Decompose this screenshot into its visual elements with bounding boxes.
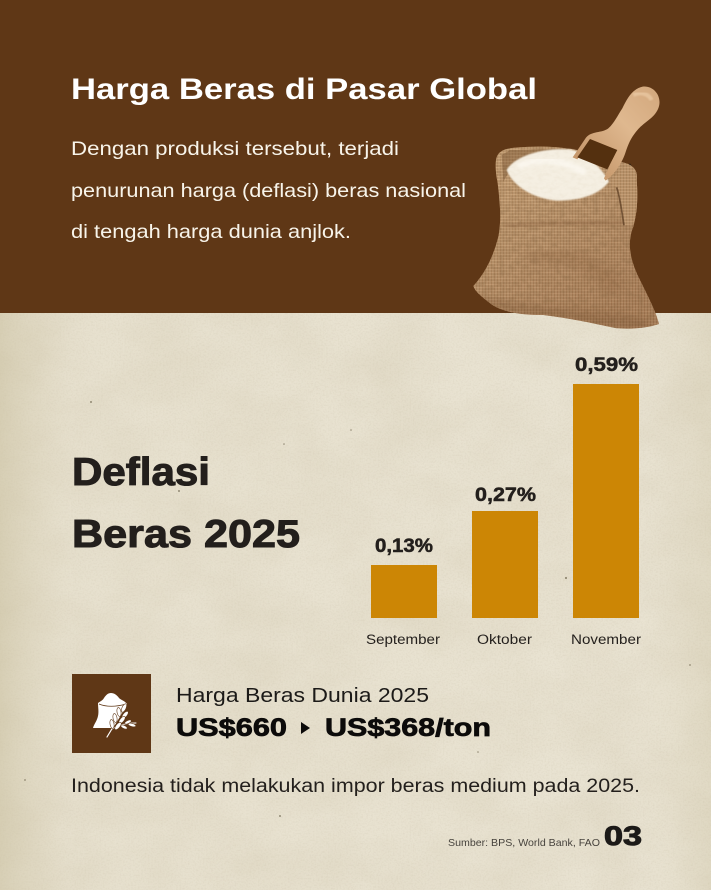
wooden scoop [573,87,660,181]
paper background [0,313,711,890]
sack back rim [610,163,637,183]
bar: November [571,355,642,647]
title: Harga Beras di Pasar Global [71,73,537,106]
sack flap at right corner [609,164,637,225]
intro text [71,138,466,243]
world rice price values: US$660 [176,714,287,742]
world rice price values [176,714,491,742]
source: Sumber: BPS, World Bank, FAO [448,837,600,849]
bar: November: November [571,632,642,647]
icon: rice sack with wooden scoop [470,87,663,333]
intro text: penurunan harga (deflasi) beras nasional [71,180,466,202]
bar: Oktober: 0,27% [475,485,536,506]
icon: sack of rice with wheat stalk [72,674,151,753]
bar: September: September [366,632,441,647]
rice grains [503,146,612,203]
bar: November: 0,59% [575,355,638,376]
heading: Deflasi Beras 2025: Beras 2025 [72,513,300,556]
brown header panel [0,0,711,313]
heading: Deflasi Beras 2025: Deflasi [72,451,210,494]
world rice price values: US$368/ton [325,714,491,742]
page number: 03 [604,821,642,851]
heading: Deflasi Beras 2025 [72,451,300,556]
arrow [301,722,310,734]
bar: September: 0,13% [375,536,433,557]
sack body [470,143,663,333]
intro text: Dengan produksi tersebut, terjadi [71,138,399,160]
bar: Oktober [472,485,538,647]
bar: Oktober: Oktober [477,632,533,647]
import note: Indonesia tidak melakukan impor beras medium pada 2025. [71,776,640,797]
bar: September [366,536,441,647]
world rice price label: Harga Beras Dunia 2025 [176,685,429,707]
intro text: di tengah harga dunia anjlok. [71,221,351,243]
bar chart [366,355,642,647]
